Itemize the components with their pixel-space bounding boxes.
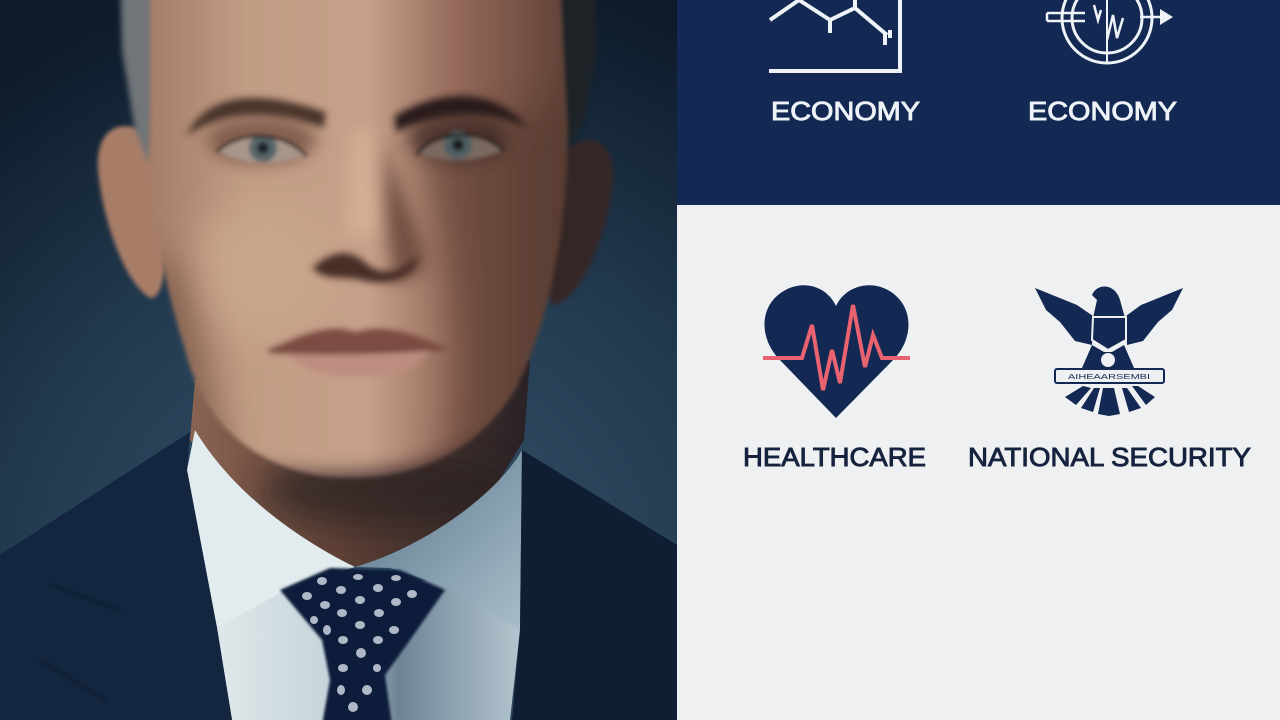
right collar	[355, 450, 522, 630]
panel: portrait photo	[0, 0, 677, 720]
label: economy left: ECONOMY	[771, 96, 920, 126]
nose base	[312, 253, 418, 283]
portrait background	[0, 0, 677, 720]
left eye socket	[207, 116, 317, 164]
label: economy right: ECONOMY	[1028, 96, 1177, 126]
icon: economy line chart	[769, 0, 900, 71]
right face shadow	[408, 107, 564, 458]
left jaw shadow	[162, 248, 240, 436]
panel: light icons area	[677, 205, 1280, 720]
left eye	[216, 134, 307, 163]
right ear	[545, 140, 613, 305]
left collar	[187, 430, 355, 628]
hair	[120, 0, 597, 165]
tie	[280, 568, 445, 720]
right eye	[416, 131, 504, 160]
right suit lapel	[512, 450, 677, 720]
left ear	[98, 126, 167, 298]
label: healthcare: HEALTHCARE	[743, 442, 926, 472]
shirt	[217, 580, 520, 720]
icon: economy globe target	[1047, 0, 1173, 64]
label: national security: NATIONAL SECURITY	[968, 442, 1251, 472]
right eye socket	[408, 114, 508, 162]
cheek highlight	[190, 218, 249, 324]
nose highlight	[345, 130, 378, 235]
face	[140, 0, 580, 500]
chin shadow	[266, 440, 466, 480]
icon: heart with pulse	[763, 285, 910, 418]
icon: eagle emblem	[1035, 287, 1183, 416]
left suit lapel	[0, 432, 232, 720]
nose shadow	[385, 140, 425, 285]
lapel edge	[40, 585, 120, 700]
neck	[190, 360, 530, 567]
left brow	[186, 98, 326, 136]
mouth	[268, 328, 444, 377]
panel: navy icons band	[677, 0, 1280, 205]
icon: eagle emblem: AIHEAARSEMBI	[1068, 372, 1150, 381]
right brow	[394, 96, 528, 132]
